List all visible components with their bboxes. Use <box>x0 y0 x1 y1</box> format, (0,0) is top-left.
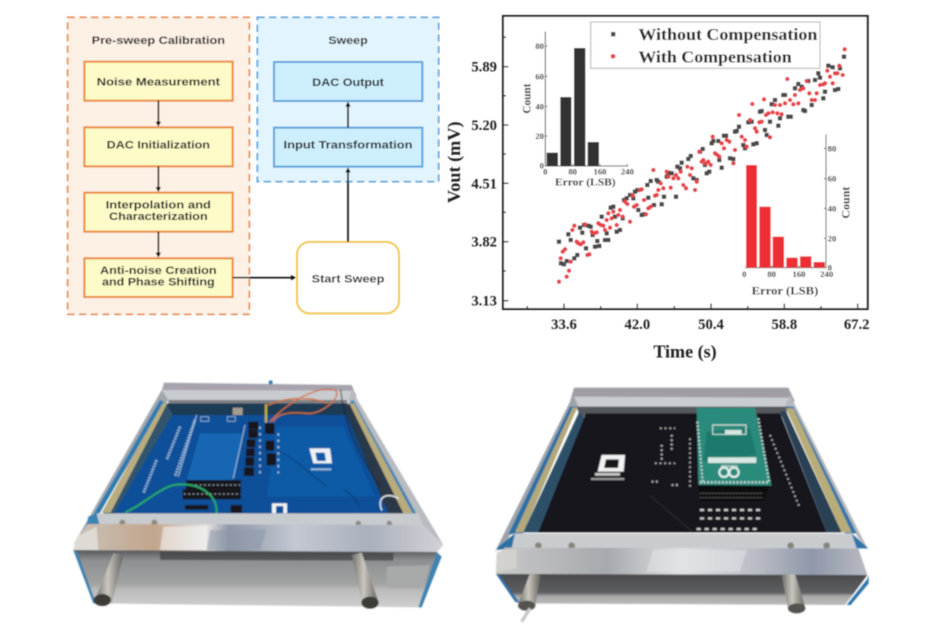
x axis ticks <box>527 304 858 309</box>
x axis tick labels: 67.2 <box>844 317 869 333</box>
box: noise measurement: Noise Measurement <box>97 77 220 89</box>
panel: pre-sweep calibration <box>68 17 249 314</box>
front panel <box>73 550 437 607</box>
black circuit board <box>538 413 827 532</box>
series: without compensation <box>557 55 846 266</box>
inset histogram: without compensation: Error (LSB) <box>555 177 616 188</box>
x axis tick labels: 58.8 <box>772 317 797 333</box>
wires <box>126 389 398 513</box>
y axis tick labels: 5.20 <box>471 118 497 134</box>
heading: sweep: Sweep <box>328 35 368 47</box>
board logo <box>598 455 625 472</box>
rail <box>88 513 423 525</box>
inset histogram: without compensation: 0 <box>540 161 544 171</box>
inset histogram: with compensation: 80 <box>828 143 836 153</box>
inset histogram: without compensation: 40 <box>535 101 544 111</box>
x axis tick labels: 42.0 <box>625 317 650 333</box>
photo: black DAC board with Arduino <box>495 388 869 622</box>
Arduino board <box>697 408 772 501</box>
arrow: interpolation to anti-noise <box>156 232 161 258</box>
board details <box>143 408 375 513</box>
y axis tick labels: 4.51 <box>471 176 497 192</box>
bars <box>547 48 599 166</box>
BNC connector right <box>782 574 805 613</box>
scatter chart <box>444 16 869 363</box>
blue circuit board <box>114 415 388 513</box>
box: DAC output: DAC Output <box>312 77 384 89</box>
inset histogram: with compensation: 240 <box>820 269 833 279</box>
heading: pre-sweep calibration: Pre-sweep Calibration <box>92 35 225 47</box>
box: input transformation: Input Transformation <box>283 140 413 152</box>
inset histogram: without compensation: 160 <box>594 167 606 177</box>
bars <box>746 165 825 268</box>
x axis tick labels: 50.4 <box>698 317 724 333</box>
inset histogram: without compensation: 80 <box>535 41 544 51</box>
box: interpolation and characterization: Characterization <box>109 211 208 223</box>
inset histogram: without compensation: 60 <box>535 71 544 81</box>
box: noise measurement <box>84 62 233 101</box>
inset histogram: without compensation: 0 <box>543 167 547 177</box>
rail <box>505 533 858 548</box>
inset histogram: with compensation: Count <box>839 187 853 219</box>
box: start sweep: Start Sweep <box>312 273 384 285</box>
foil top of front panel <box>73 524 443 553</box>
legend <box>591 22 820 68</box>
x axis title: Time (s) <box>653 342 717 363</box>
legend label: without compensation: Without Compensation <box>638 25 818 44</box>
inset histogram: with compensation: 40 <box>828 203 836 213</box>
box: interpolation and characterization <box>84 193 233 232</box>
series: with compensation <box>559 49 845 282</box>
flowchart <box>68 17 439 314</box>
box: DAC output <box>274 62 422 101</box>
inset histogram: with compensation: 0 <box>742 269 746 279</box>
foil top of front panel <box>496 548 867 575</box>
legend marker: without compensation <box>611 32 615 36</box>
inset histogram: with compensation: 0 <box>828 263 832 273</box>
inset histogram: without compensation <box>522 32 634 188</box>
box: anti-noise creation and phase shifting <box>84 258 233 297</box>
y axis tick labels <box>471 60 497 310</box>
front panel <box>496 574 867 605</box>
box: DAC initialization: DAC Initialization <box>107 140 210 152</box>
panel: sweep <box>257 17 439 182</box>
interior base <box>102 403 413 517</box>
inset histogram: without compensation: 80 <box>568 167 577 177</box>
BNC connector left <box>518 573 541 611</box>
enclosure sides and back <box>73 380 443 545</box>
cable <box>522 608 530 622</box>
box: DAC initialization <box>84 127 233 166</box>
box: start sweep <box>297 242 399 313</box>
y axis tick labels: 3.82 <box>471 235 497 251</box>
inset histogram: with compensation: 80 <box>767 269 776 279</box>
y axis tick labels: 5.89 <box>471 60 497 76</box>
inset histogram: without compensation: Count <box>522 83 534 114</box>
inset histogram: with compensation: 20 <box>828 233 836 243</box>
legend label: with compensation: With Compensation <box>638 48 792 67</box>
x axis tick labels <box>551 317 869 333</box>
BNC connector right <box>352 553 379 609</box>
board logo <box>309 448 332 463</box>
inset histogram: with compensation: 60 <box>828 174 836 184</box>
arrow: start sweep to input transformation <box>345 167 351 242</box>
inset histogram: with compensation: Error (LSB) <box>752 286 819 298</box>
box: interpolation and characterization: Interpolation and <box>106 200 211 212</box>
Arduino board: ARDUINO <box>721 465 738 469</box>
legend marker: with compensation <box>611 54 615 59</box>
y axis title: Vout (mV) <box>444 121 465 203</box>
chips <box>183 422 276 513</box>
plot frame <box>503 16 868 309</box>
box: anti-noise creation and phase shifting: Anti-noise Creation <box>100 265 217 277</box>
box: input transformation <box>274 128 422 167</box>
inset histogram: without compensation: 20 <box>535 131 544 141</box>
x axis tick labels: 33.6 <box>551 317 577 333</box>
inset histogram: without compensation: 240 <box>621 167 634 177</box>
board details <box>591 428 800 532</box>
photo: blue DAC board in enclosure <box>73 380 443 609</box>
inset histogram: with compensation <box>742 134 853 298</box>
arrow: input transformation to DAC output <box>345 102 351 128</box>
arrow: DAC init to interpolation <box>156 166 161 192</box>
box: anti-noise creation and phase shifting: and Phase Shifting <box>102 276 215 288</box>
BNC connector left <box>94 553 123 606</box>
arrow: anti-noise to start sweep <box>233 275 296 280</box>
arrow: noise to DAC init <box>156 101 161 127</box>
enclosure sides and back <box>495 388 868 552</box>
y axis ticks <box>503 37 508 301</box>
inset histogram: with compensation: 160 <box>793 269 805 279</box>
y axis tick labels: 3.13 <box>471 294 497 310</box>
